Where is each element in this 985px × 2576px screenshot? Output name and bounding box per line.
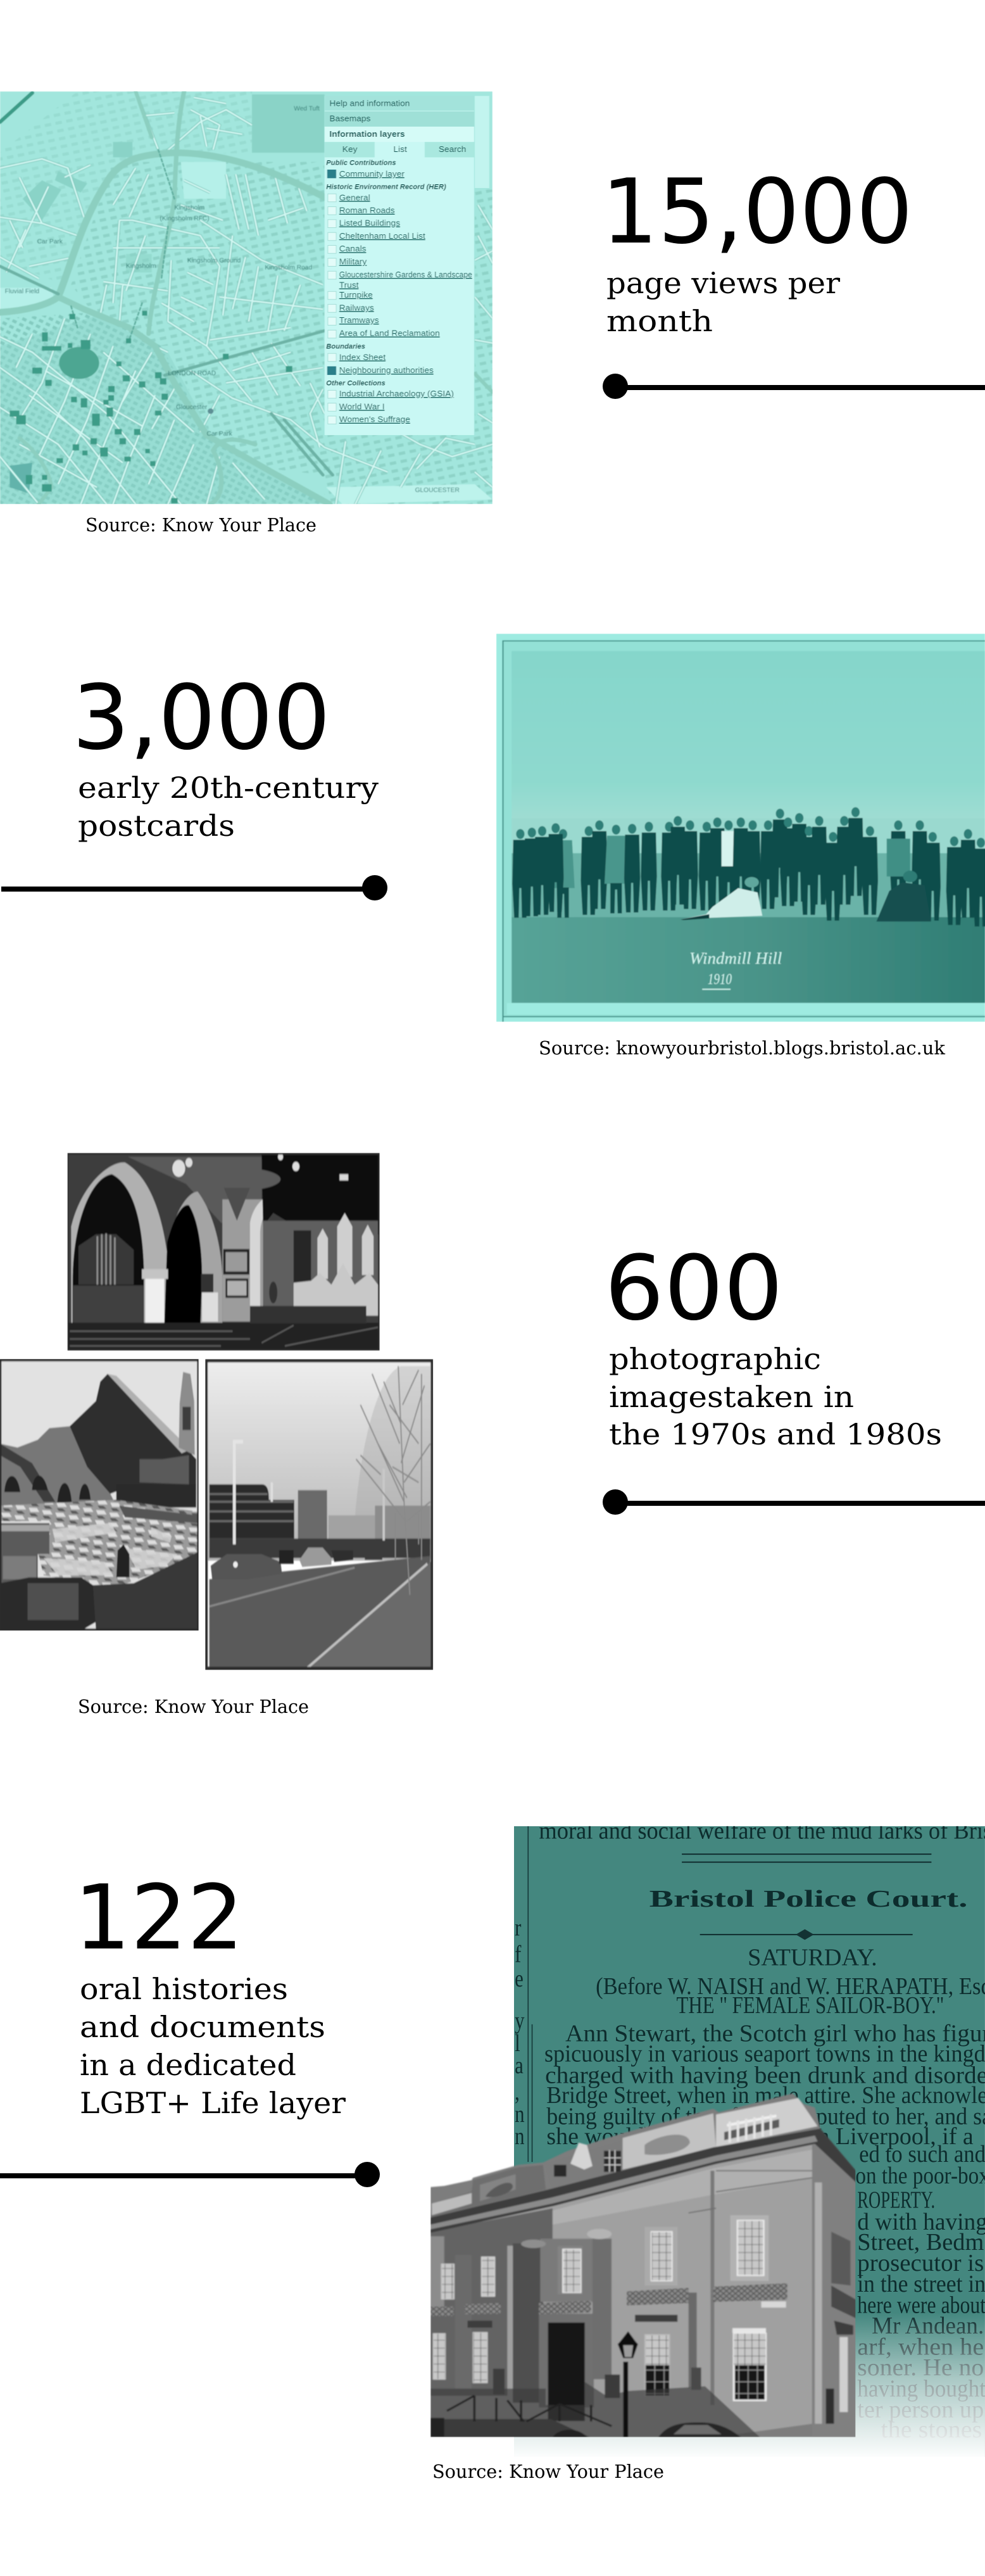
map layers panel: List [393, 145, 407, 154]
stat number: 122 [74, 1866, 244, 1970]
map layers panel: Gloucestershire Gardens & Landscape [339, 270, 472, 279]
source caption: Source: knowyourbristol.blogs.bristol.ac.uk [539, 1037, 945, 1059]
map layers panel: World War I [339, 402, 385, 411]
image: Bristol Police Court newspaper clipping: (Before W. NAISH and W. HERAPATH, Esq. [596, 1973, 985, 2000]
seated man [876, 882, 931, 921]
image: Bristol Police Court newspaper clipping: Street, Bedm [857, 2229, 984, 2256]
stat description: the 1970s and 1980s [609, 1417, 942, 1451]
map layers panel: General [339, 193, 370, 202]
map labels: (Kingsholm RFC) [160, 215, 210, 222]
parked car [658, 2422, 741, 2437]
map layers panel: Boundaries [326, 343, 365, 350]
map labels: Car Park [207, 431, 232, 438]
steps and railings [430, 2419, 590, 2437]
connector line with dot [1, 875, 387, 900]
image: Bristol Police Court newspaper clipping: she would be sent home from Liverpool, if a [546, 2123, 974, 2150]
stat description: early 20th-century [78, 771, 379, 805]
stat description: month [606, 304, 713, 338]
map labels: Kingsholm [126, 263, 156, 270]
image: Bristol Police Court newspaper clipping: Ann Stewart, the Scotch girl who has figured [565, 2020, 985, 2047]
handwritten caption [689, 949, 782, 990]
image: Bristol Police Court newspaper clipping: here were about [857, 2292, 985, 2318]
image: Windmill Hill 1910 postcard [496, 634, 985, 1022]
photo: bombed church rubble [0, 1359, 199, 1631]
crowd of men [512, 807, 985, 926]
cast shadows at the base [430, 2382, 760, 2437]
map layers panel: Military [339, 257, 367, 267]
stat description [606, 266, 840, 338]
handwritten caption: Windmill Hill [689, 949, 782, 968]
image: court building photograph [430, 2093, 856, 2437]
image: Bristol Police Court newspaper clipping: moral and social welfare of the mud larks of Bristol [539, 1818, 985, 1844]
fade to white at the foot [512, 2313, 985, 2459]
map layers panel: Turnpike [339, 290, 373, 300]
main facade sunlit and shaded [430, 2145, 812, 2437]
image: Bristol Police Court newspaper clipping: prosecutor is [857, 2250, 984, 2276]
image: Bristol Police Court newspaper clipping: arf, when he [857, 2334, 984, 2360]
stat number: 3,000 [72, 666, 330, 770]
image: Bristol Police Court newspaper clipping: being guilty of the offence imputed to her, and said [546, 2104, 985, 2130]
stat description [609, 1342, 942, 1451]
map labels: Kingsholm Ground [187, 258, 241, 265]
windows [433, 2215, 769, 2401]
map minor streets [0, 91, 492, 504]
map labels: Wed Tuft [294, 105, 320, 112]
right return wall [812, 2135, 856, 2437]
stat description [78, 771, 379, 843]
stat description: page views per [606, 266, 840, 300]
stat number: 600 [605, 1237, 783, 1341]
map layers panel: Railways [339, 303, 374, 312]
image: Bristol Police Court newspaper clipping: l [515, 2030, 520, 2057]
map layers panel: Trust [339, 281, 359, 289]
image: Bristol Police Court newspaper clipping: SATURDAY. [748, 1945, 877, 1971]
stat description: imagestaken in [609, 1380, 854, 1414]
image: Bristol Police Court newspaper clipping: spicuously in various seaport towns in the kingdom [544, 2041, 985, 2067]
image: Bristol Police Court newspaper clipping [512, 1818, 985, 2459]
image: Bristol Police Court newspaper clipping: ROPERTY. [857, 2187, 935, 2213]
image group: three photographs [0, 1153, 433, 1670]
grass [511, 917, 985, 1003]
photo: modern street [205, 1359, 433, 1670]
image: Bristol Police Court newspaper clipping: n [515, 2123, 525, 2150]
map layers panel: Women's Suffrage [339, 415, 410, 424]
attic storey [430, 2165, 546, 2218]
map labels: Kingsholm Road [265, 265, 312, 271]
map layers panel: Information layers [329, 129, 405, 139]
map labels: Fluvial Field [5, 288, 39, 295]
map labels [5, 105, 460, 494]
source caption: Source: Know Your Place [432, 2461, 664, 2482]
image: Bristol Police Court newspaper clipping: Bristol Police Court. [649, 1886, 968, 1912]
image: Bristol Police Court newspaper clipping: Bridge Street, when in male attire. She acknowledged [546, 2082, 985, 2109]
cars [211, 1554, 282, 1579]
image: Bristol Police Court newspaper clipping: the stones [881, 2416, 982, 2443]
stat number: 15,000 [601, 160, 913, 264]
map layers panel: Search [439, 145, 466, 154]
stat description: and documents [80, 2010, 325, 2044]
map heritage markers [9, 311, 292, 503]
stat description: in a dedicated [80, 2048, 296, 2082]
map layers panel: Community layer [339, 169, 405, 179]
map layers panel: Roman Roads [339, 206, 395, 215]
map layers panel: Index Sheet [339, 353, 386, 362]
section: postcards [1, 634, 985, 1059]
map building texture [0, 91, 492, 504]
map layers panel: Key [342, 145, 358, 154]
image: Bristol Police Court newspaper clipping: a [515, 2052, 524, 2079]
bare trees [356, 1366, 430, 1595]
image: Bristol Police Court newspaper clipping: , [515, 2079, 520, 2106]
stat description: oral histories [80, 1972, 288, 2006]
image: Bristol Police Court newspaper clipping: f [515, 1941, 522, 1967]
cornice [430, 2128, 856, 2233]
entrance door [548, 2323, 585, 2421]
map labels: Car Park [37, 239, 63, 246]
image: Bristol Police Court newspaper clipping: ter person up [857, 2397, 984, 2423]
connector line with dot [603, 1489, 985, 1515]
map layers panel: Industrial Archaeology (GSIA) [339, 389, 454, 398]
map labels: Gloucester [176, 404, 208, 411]
section: oral histories [0, 1818, 985, 2482]
map main roads [0, 91, 492, 504]
stat description: photographic [609, 1342, 821, 1376]
image: Bristol Police Court newspaper clipping: on the poor-box [855, 2162, 985, 2189]
image: Bristol Police Court newspaper clipping: n [515, 2101, 525, 2128]
handwritten caption: 1910 [708, 970, 732, 988]
reclining man [681, 877, 762, 920]
map layers panel: Listed Buildings [339, 218, 400, 227]
connector line with dot [603, 374, 985, 399]
image: Bristol Police Court newspaper clipping: having bought [857, 2376, 985, 2402]
image: Bristol Police Court newspaper clipping: r [515, 1915, 522, 1941]
image: Know Your Place map screenshot [0, 91, 492, 504]
image: Bristol Police Court newspaper clipping: e [515, 1966, 524, 1992]
section: page views [0, 91, 985, 536]
map layers panel: Neighbouring authorities [339, 366, 434, 375]
volute capitals [587, 2229, 612, 2239]
map darker blocks [0, 94, 492, 504]
map layers panel: Historic Environment Record (HER) [326, 184, 446, 191]
map layers panel: Public Contributions [326, 160, 396, 167]
section: photographic images [0, 1153, 985, 1717]
image: Bristol Police Court newspaper clipping: ed to such and [859, 2141, 985, 2168]
source caption: Source: Know Your Place [78, 1696, 309, 1717]
friezes [430, 2283, 787, 2316]
stat description: LGBT+ Life layer [80, 2086, 346, 2120]
image: Bristol Police Court newspaper clipping: soner. He no [857, 2354, 984, 2381]
connector line with dot [0, 2162, 380, 2187]
stat description: postcards [78, 809, 235, 843]
image: Bristol Police Court newspaper clipping: charged with having been drunk and disorderly [545, 2062, 985, 2088]
map layers panel: Other Collections [326, 380, 386, 387]
map layers panel: Area of Land Reclamation [339, 329, 440, 338]
image: Bristol Police Court newspaper clipping: THE " FEMALE SAILOR-BOY." [677, 1992, 944, 2019]
image: Bristol Police Court newspaper clipping: Mr Andean. [872, 2313, 984, 2339]
map layers panel: Canals [339, 244, 367, 253]
source caption: Source: Know Your Place [85, 514, 317, 536]
map layers panel: Basemaps [329, 114, 371, 123]
image: Bristol Police Court newspaper clipping: d with having [857, 2209, 985, 2235]
image: Bristol Police Court newspaper clipping: y [515, 2008, 525, 2035]
photo: church interior [68, 1153, 380, 1351]
map labels: GLOUCESTER [415, 487, 460, 494]
map layers panel: Tramways [339, 315, 379, 325]
map labels: Kingsholm [175, 205, 204, 212]
stat description [80, 1972, 346, 2120]
image: Bristol Police Court newspaper clipping: in the street in [857, 2271, 985, 2297]
map layers panel: Help and information [329, 99, 410, 108]
map labels: LONDON ROAD [168, 370, 216, 377]
map layers panel: Cheltenham Local List [339, 231, 425, 241]
street lamp [618, 2331, 638, 2358]
map layers panel [325, 96, 489, 435]
